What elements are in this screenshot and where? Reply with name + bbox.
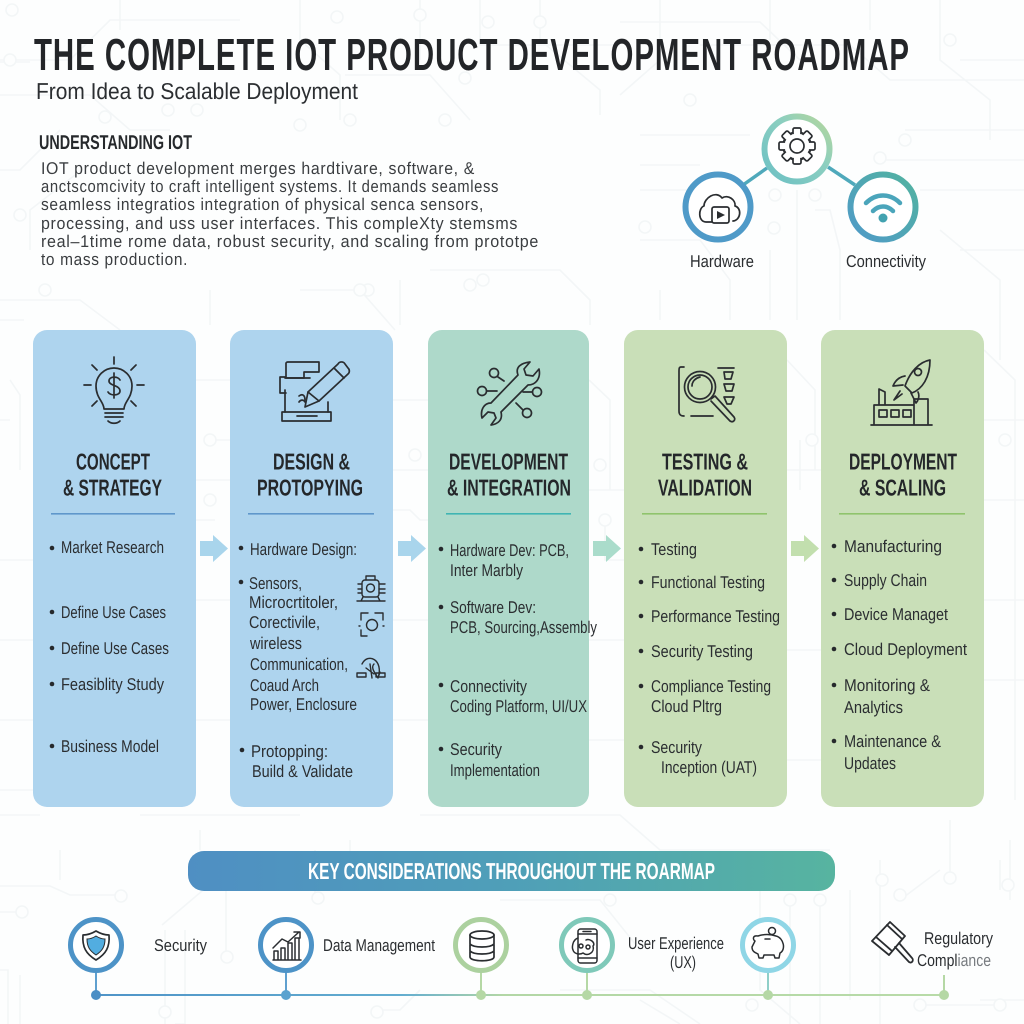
intro paragraph: anctscomcivity to craft intelligent systems. It demands seamless xyxy=(41,177,499,196)
list: Supply Chain xyxy=(844,571,927,590)
heading xyxy=(658,448,752,500)
diagram: IoT pillars xyxy=(686,116,926,271)
list: PCB, Sourcing,Assembly xyxy=(450,618,597,637)
list: Software Dev: xyxy=(450,598,536,617)
icon: rocket and factory xyxy=(871,360,932,425)
heading: & STRATEGY xyxy=(63,474,162,500)
list: Analytics xyxy=(844,698,903,717)
list: Manufacturing xyxy=(844,537,942,556)
list: Business Model xyxy=(61,737,159,756)
list xyxy=(639,540,780,777)
heading xyxy=(63,448,162,500)
list: Security Testing xyxy=(651,642,753,661)
intro paragraph: real–1time rome data, robust security, and scaling from prototpe xyxy=(41,232,539,251)
heading: DEVELOPMENT xyxy=(449,448,568,474)
list: Cloud Deployment xyxy=(844,640,967,659)
arrow xyxy=(200,535,228,562)
user experience label xyxy=(628,934,724,972)
intro paragraph: to mass production. xyxy=(41,250,188,269)
heading xyxy=(447,448,571,500)
list: Hardware Design: xyxy=(250,540,357,559)
list: Market Research xyxy=(61,538,164,557)
list: Testing xyxy=(651,540,697,559)
panel: deployment and scaling xyxy=(821,330,984,807)
icon: light bulb with dollar xyxy=(84,357,144,423)
list: Implementation xyxy=(450,761,540,780)
icon: hardware cloud xyxy=(686,174,750,240)
regulatory compliance label: Regulatory xyxy=(924,929,993,948)
arrow xyxy=(791,535,819,562)
list: Maintenance & xyxy=(844,732,942,751)
subtitle: From Idea to Scalable Deployment xyxy=(36,78,359,104)
list: Feasiblity Study xyxy=(61,675,164,694)
icon: user experience phone xyxy=(562,920,612,970)
user experience label: (UX) xyxy=(670,953,696,972)
banner: key considerations: KEY CONSIDERATIONS THROUGHOUT THE ROARMAP xyxy=(308,858,715,884)
user experience label: User Experience xyxy=(628,934,724,953)
timeline xyxy=(91,970,949,1000)
list: Inception (UAT) xyxy=(661,758,757,777)
list: Hardware Dev: PCB, xyxy=(450,541,569,560)
list: Power, Enclosure xyxy=(250,695,357,714)
list: Sensors, xyxy=(249,574,302,593)
list: Build & Validate xyxy=(252,762,353,781)
list: Coaud Arch xyxy=(250,676,319,695)
list: Corectivile, xyxy=(249,613,320,632)
intro paragraph xyxy=(41,159,539,269)
intro heading: UNDERSTANDING IOT xyxy=(39,132,192,154)
icon: gear xyxy=(764,116,830,182)
panel: testing and validation xyxy=(624,330,787,807)
list: Compliance Testing xyxy=(651,677,771,696)
list xyxy=(239,540,357,781)
list xyxy=(832,537,967,773)
heading: DESIGN & xyxy=(273,448,350,474)
data management label: Data Management xyxy=(323,936,435,955)
heading: VALIDATION xyxy=(658,474,752,500)
hardware label: Hardware xyxy=(690,252,754,271)
connectivity label: Connectivity xyxy=(846,252,926,271)
connectors xyxy=(743,167,855,185)
list: Cloud Pltrg xyxy=(651,697,722,716)
list: Protopping: xyxy=(251,742,328,761)
list xyxy=(439,541,597,780)
icon: magnifier with checklist xyxy=(679,367,735,422)
icon: gavel xyxy=(872,922,913,963)
heading: CONCEPT xyxy=(76,448,150,474)
heading xyxy=(849,448,957,500)
icon: machine and pencil xyxy=(280,362,349,421)
list: Communication, xyxy=(250,655,348,674)
list: wireless xyxy=(249,634,302,653)
list: Security xyxy=(651,738,702,757)
regulatory compliance label: Compliance xyxy=(917,951,991,970)
icon: camera sensor xyxy=(359,613,384,636)
intro paragraph: processing, and uss user interfaces. This compleXty stemsms xyxy=(41,214,518,233)
list: Inter Marbly xyxy=(450,561,523,580)
list: Define Use Cases xyxy=(61,639,169,658)
icon: data chart xyxy=(260,920,312,970)
panel: concept and strategy xyxy=(33,330,196,807)
icon: antenna xyxy=(357,658,385,678)
list: Coding Platform, UI/UX xyxy=(450,697,587,716)
list: Functional Testing xyxy=(651,573,765,592)
arrow xyxy=(398,535,426,562)
icon: database xyxy=(456,920,506,970)
icon: wrench with nodes xyxy=(478,362,542,425)
heading: TESTING & xyxy=(662,448,748,474)
list: Connectivity xyxy=(450,677,527,696)
regulatory compliance label xyxy=(917,929,993,970)
panel: design and prototyping xyxy=(230,330,393,807)
banner: key considerations xyxy=(188,851,835,891)
heading xyxy=(257,448,363,500)
list: Microcrtitoler, xyxy=(249,593,338,612)
list: Security xyxy=(450,740,502,759)
icon: sensor chip xyxy=(357,576,385,601)
icon: security shield xyxy=(70,920,122,970)
icon: wifi xyxy=(850,174,916,240)
panel: development and integration xyxy=(428,330,597,807)
heading: PROTOPYING xyxy=(257,474,363,500)
security label: Security xyxy=(154,936,207,955)
icon: piggy bank xyxy=(742,920,794,970)
heading: DEPLOYMENT xyxy=(849,448,957,474)
intro paragraph: IOT product development merges hardtivare, software, & xyxy=(41,159,475,178)
list: Monitoring & xyxy=(844,676,931,695)
intro paragraph: seamless integratios integration of physical senca sensors, xyxy=(41,195,484,214)
heading: & INTEGRATION xyxy=(447,474,571,500)
text block: understanding IoT xyxy=(39,132,539,269)
list: Performance Testing xyxy=(651,607,780,626)
heading: & SCALING xyxy=(859,474,946,500)
list: Updates xyxy=(844,754,896,773)
arrow xyxy=(593,535,621,562)
list xyxy=(50,538,169,756)
list: Define Use Cases xyxy=(61,603,166,622)
list: Device Managet xyxy=(844,605,948,624)
